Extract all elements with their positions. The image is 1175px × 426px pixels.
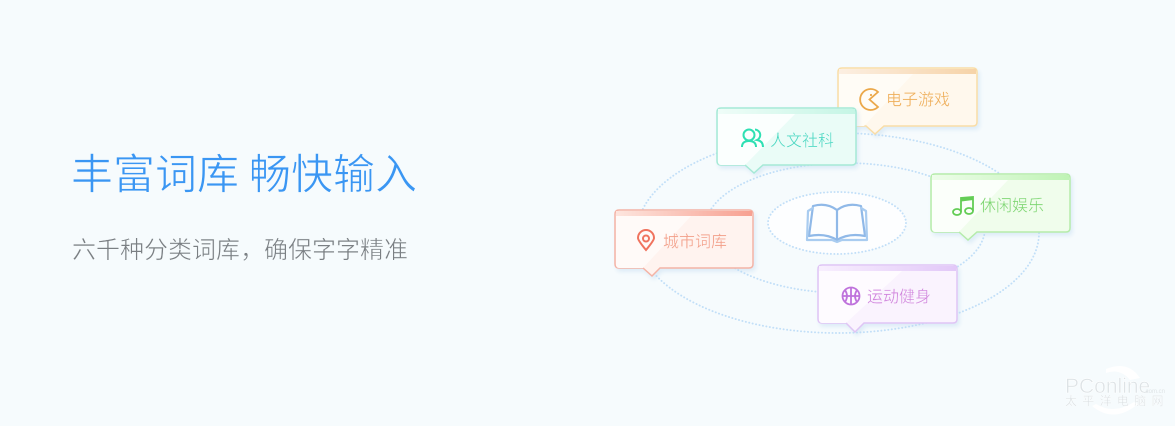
card: 休闲娱乐 <box>931 174 1070 240</box>
title: 丰富词库 <box>71 151 239 198</box>
icon: music note <box>953 197 973 215</box>
icon: basketball <box>842 288 860 304</box>
watermark: PConline logo: .com.cn <box>1144 389 1165 395</box>
card: 电子游戏 <box>838 68 977 134</box>
title: 畅快输入 <box>249 151 417 198</box>
card: 城市词库 <box>615 210 753 276</box>
watermark: PConline logo: 太平洋电脑网 <box>1065 393 1169 408</box>
icon: people <box>742 130 763 147</box>
title <box>71 151 417 198</box>
icon: pac-man <box>860 89 878 110</box>
watermark: PConline logo: PConline <box>1065 375 1150 398</box>
orbit diagram: dotted ellipses <box>637 133 1039 333</box>
label: 电子游戏 <box>886 91 950 109</box>
label: 休闲娱乐 <box>980 197 1044 215</box>
card: 运动健身 <box>818 265 957 332</box>
label: 城市词库 <box>663 233 727 251</box>
icon: map pin <box>638 230 654 250</box>
subtitle: 六千种分类词库，确保字字精准 <box>72 237 408 264</box>
label: 人文社科 <box>770 132 834 150</box>
icon: open book <box>807 205 867 242</box>
label: 运动健身 <box>867 288 931 306</box>
watermark: PConline logo <box>1065 366 1169 415</box>
card: 人文社科 <box>717 108 856 173</box>
